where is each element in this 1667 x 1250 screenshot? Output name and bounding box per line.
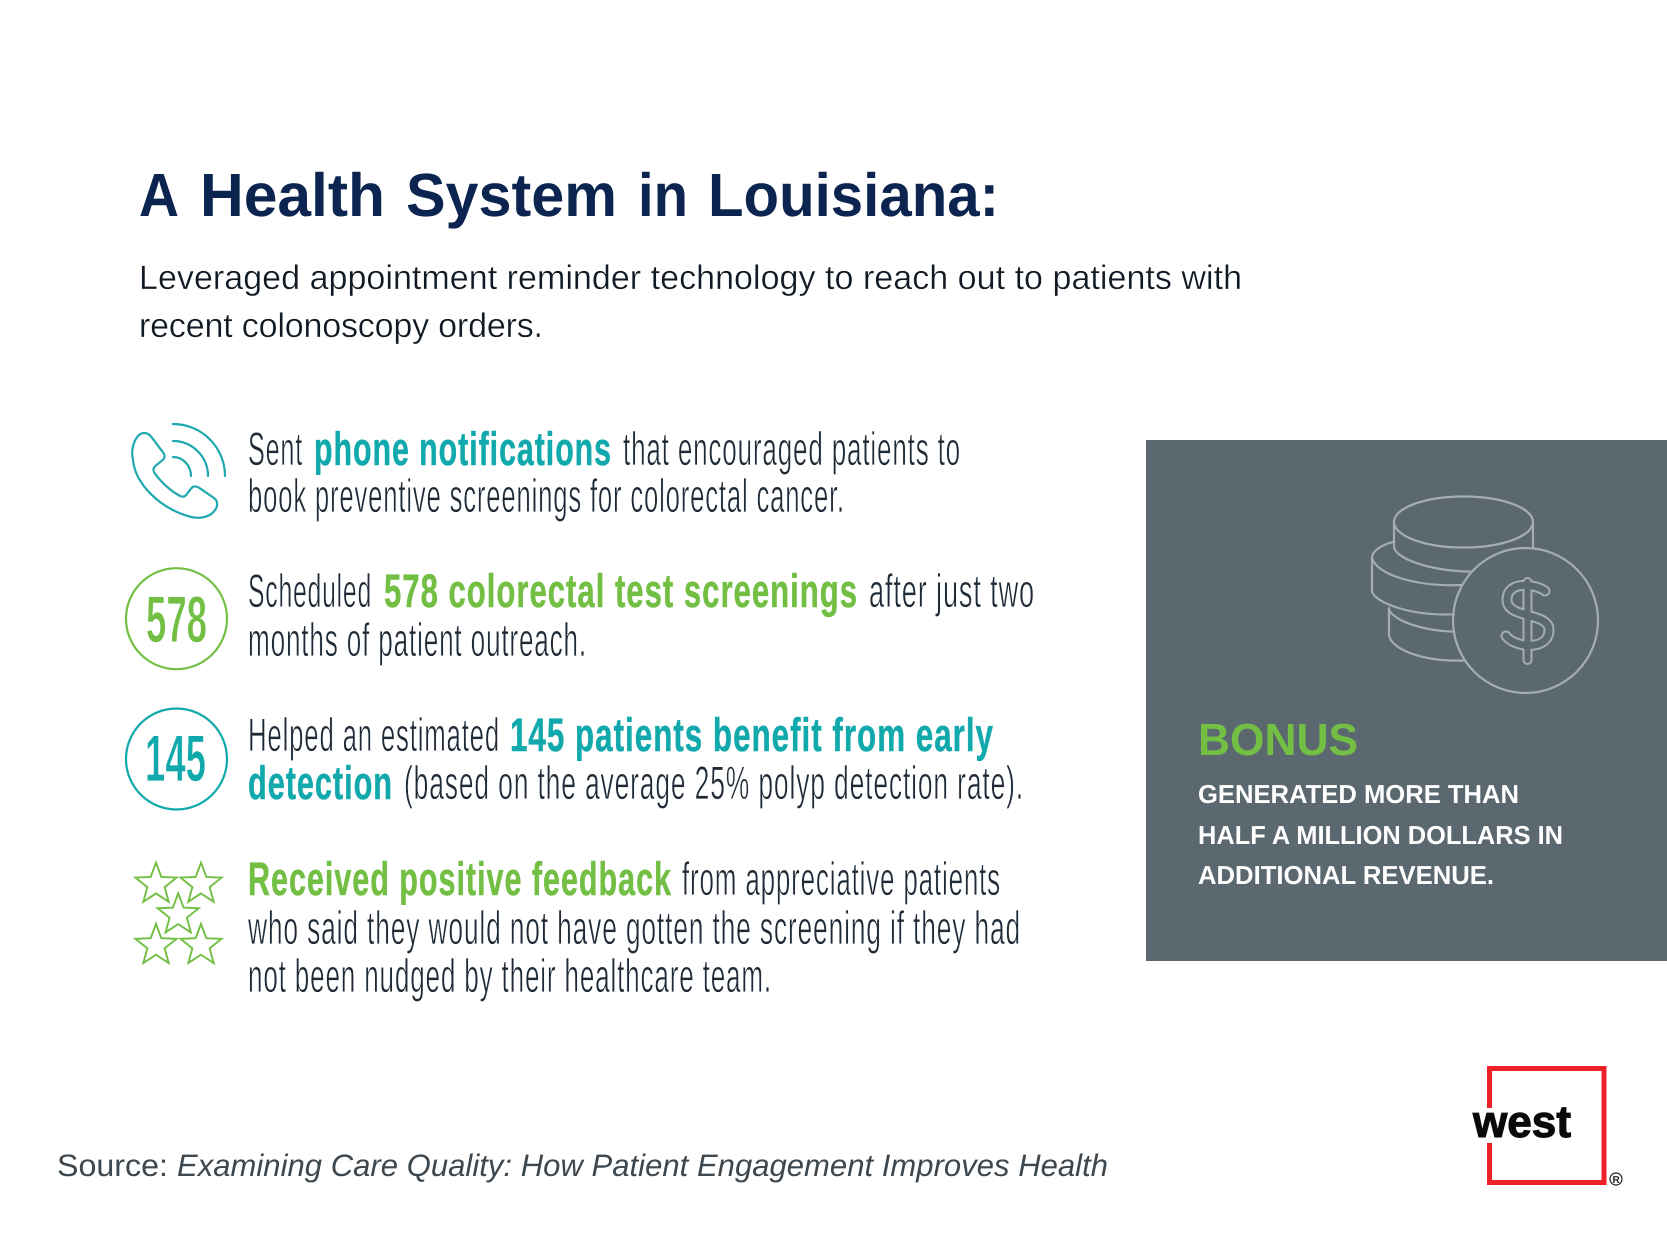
text: positive feedback: Received positive feedback	[248, 852, 672, 905]
text: phone notifications: phone notifications	[314, 422, 612, 475]
text: 578 screenings: months of patient outreach.	[248, 613, 587, 666]
text: positive feedback: from appreciative patients	[682, 852, 1001, 905]
text: positive feedback	[247, 852, 1021, 1002]
title: Louisiana:	[708, 161, 999, 229]
icon: 578 badge: 578	[146, 582, 207, 656]
bonus text: GENERATED MORE THAN	[1198, 779, 1519, 809]
text: 145 patients: 145 patients benefit from early	[510, 708, 994, 761]
logo: west: R	[1612, 1175, 1620, 1186]
bonus heading: BONUS	[1198, 714, 1358, 765]
bonus text	[1198, 779, 1563, 890]
icon: phone	[132, 424, 225, 518]
logo: west	[1472, 1068, 1622, 1186]
icon: 145 badge: 145	[145, 721, 206, 795]
title: Health	[200, 161, 385, 229]
text: 145 patients: (based on the average 25% polyp detection rate).	[404, 756, 1024, 809]
icon: five stars	[135, 863, 222, 963]
icon: 145 badge	[126, 708, 227, 810]
text: phone notifications	[248, 422, 961, 522]
panel: bonus	[1146, 440, 1667, 961]
subtitle	[139, 259, 1242, 345]
subtitle: recent colonoscopy orders.	[139, 307, 543, 345]
icon: 578 badge	[126, 568, 227, 669]
title	[139, 161, 999, 229]
text: phone notifications: Sent	[248, 422, 303, 475]
text: 145 patients: detection	[248, 756, 393, 809]
bonus text: HALF A MILLION DOLLARS IN	[1198, 820, 1563, 850]
logo: west: west	[1472, 1096, 1571, 1147]
bonus text: ADDITIONAL REVENUE.	[1198, 860, 1494, 890]
text: 145 patients	[248, 708, 1024, 809]
text: 578 screenings: after just two	[869, 564, 1035, 617]
text: 578 screenings	[248, 564, 1035, 666]
source: Source:	[57, 1148, 168, 1183]
text: positive feedback: who said they would not have gotten the screening if they had	[247, 901, 1021, 954]
text: 578 screenings: Scheduled	[248, 564, 372, 617]
icon: coins	[1372, 496, 1598, 693]
text: phone notifications: book preventive screenings for colorectal cancer.	[248, 469, 845, 522]
title: in	[638, 161, 688, 229]
text: 145 patients: Helped an estimated	[248, 708, 500, 761]
title: System	[406, 161, 617, 229]
title: A	[139, 161, 179, 229]
source: Examining Care Quality: How Patient Engagement Improves Health	[177, 1148, 1108, 1183]
subtitle: Leveraged appointment reminder technology to reach out to patients with	[139, 259, 1242, 297]
text: phone notifications: that encouraged patients to	[623, 422, 961, 475]
text: positive feedback: not been nudged by their healthcare team.	[248, 949, 772, 1002]
text: 578 screenings: 578 colorectal test screenings	[384, 564, 858, 617]
